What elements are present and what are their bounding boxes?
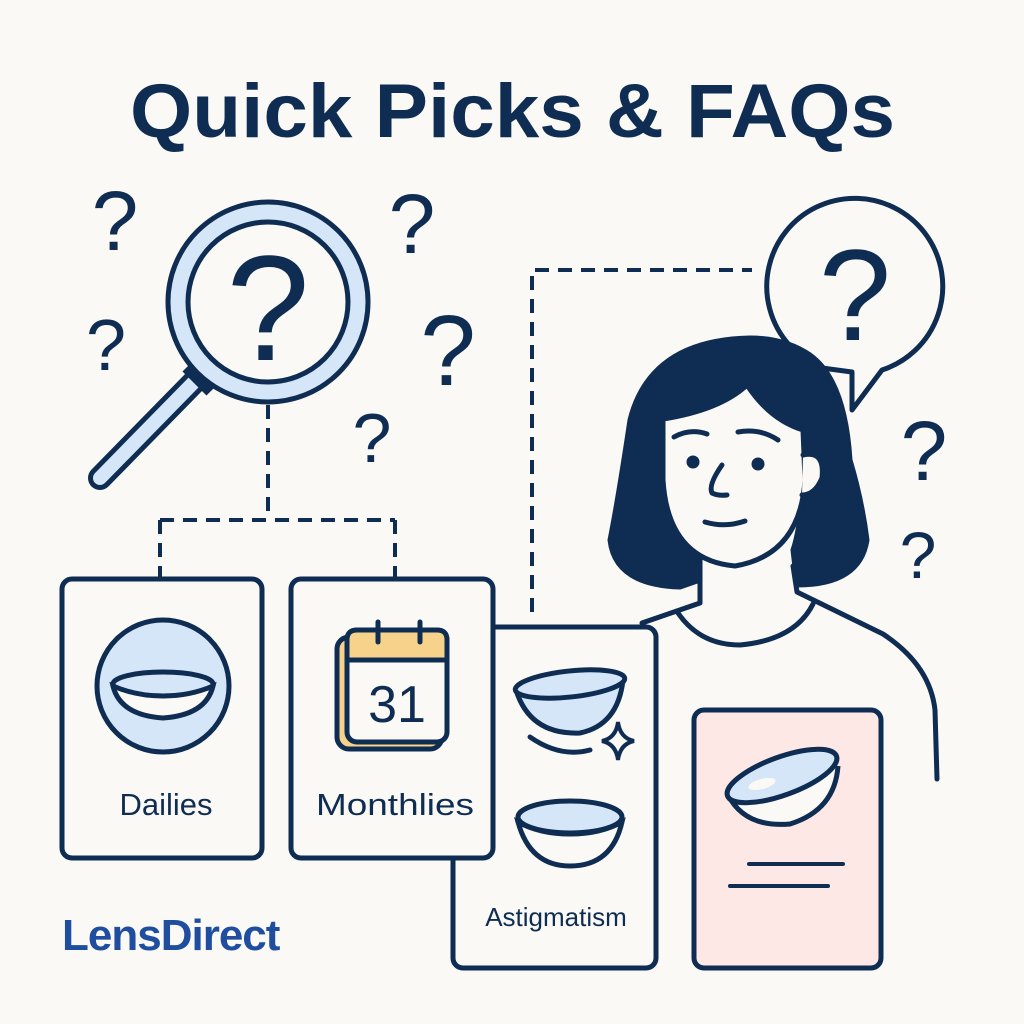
card: Astigmatism: Astigmatism — [485, 902, 627, 932]
speech bubble — [767, 198, 943, 410]
logo: LensDirect — [62, 911, 281, 960]
card: pink lens — [694, 710, 881, 968]
card: Monthlies — [291, 579, 493, 858]
woman — [610, 338, 937, 779]
question marks: ? — [900, 518, 936, 592]
connector dashed lines — [160, 270, 752, 612]
title: Quick Picks & FAQs — [130, 69, 895, 154]
icon: daily lens — [97, 620, 229, 752]
question marks — [86, 174, 947, 592]
speech bubble: ? — [819, 222, 891, 368]
card: Monthlies: Monthlies — [316, 787, 474, 822]
icon: magnifier: ? — [226, 224, 310, 392]
card: Dailies — [62, 579, 262, 858]
card: Astigmatism — [453, 627, 656, 968]
text lines — [730, 864, 843, 886]
question marks: ? — [86, 306, 126, 386]
question marks: ? — [901, 404, 947, 498]
icon: calendar 31: 31 — [368, 676, 426, 734]
question marks: ? — [420, 295, 476, 407]
icon: calendar 31 — [337, 622, 447, 749]
icon: toric lenses — [514, 665, 634, 866]
question marks: ? — [353, 399, 391, 477]
question marks: ? — [389, 177, 435, 271]
card: Dailies: Dailies — [119, 787, 213, 822]
icon: lens — [721, 738, 843, 824]
icon: magnifier — [100, 202, 368, 478]
question marks: ? — [92, 174, 138, 268]
